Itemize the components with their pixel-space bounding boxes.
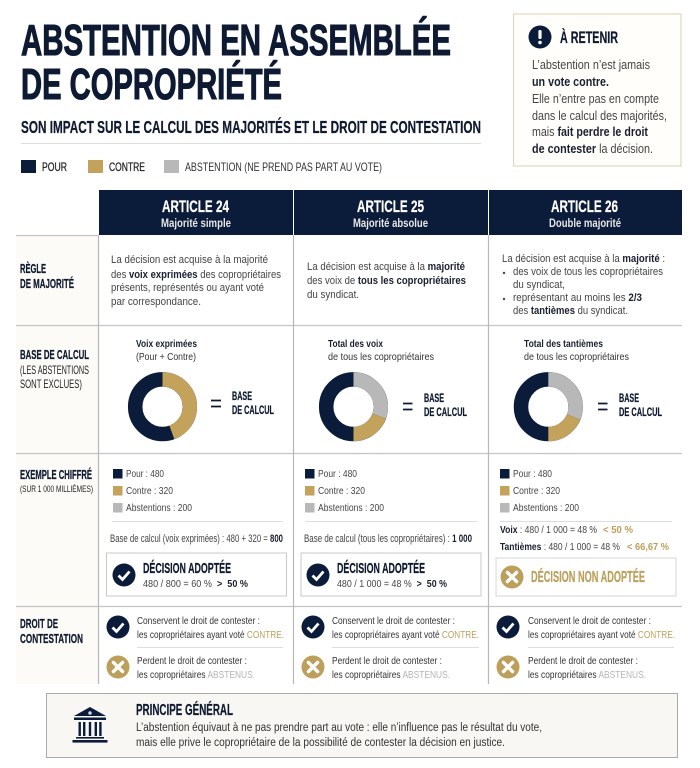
rights: article 26: Conservent le droit de contester :: [528, 615, 651, 627]
donut chart: [326, 379, 381, 434]
row label: exemple chiffré: (SUR 1 000 MILLIÈMES): [20, 484, 93, 494]
base: article 26: [521, 338, 662, 434]
rule text: article 26: des voix de tous les copropriétaires: [513, 266, 663, 278]
callout text: un vote contre.: [532, 75, 609, 89]
callout text: mais fait perdre le droit: [532, 125, 649, 139]
rule text: article 24: par correspondance.: [111, 296, 201, 308]
base: article 26: de tous les copropriétaires: [524, 351, 629, 363]
example: article 26: Voix : 480 / 1 000 = 48 %: [500, 524, 597, 536]
callout text: [532, 58, 667, 156]
header: article 26: Double majorité: [549, 218, 621, 230]
rights: article 25: Perdent le droit de contester :: [332, 655, 442, 667]
rule text: article 24: [111, 254, 281, 308]
example: article 26: [496, 468, 676, 596]
example: article 25: Contre : 320: [318, 485, 365, 497]
panel heading: PRINCIPE GÉNÉRAL: [136, 700, 233, 719]
rights: article 26: les copropriétaires ABSTENUS.: [528, 669, 646, 681]
header: article 26: [489, 190, 682, 235]
title: [21, 15, 451, 109]
rule text: article 24: présents, représentés ou ayant voté: [111, 282, 264, 294]
callout text: Elle n’entre pas en compte: [532, 92, 659, 106]
example: article 26: Abstentions : 200: [513, 502, 579, 514]
row label: exemple chiffré: EXEMPLE CHIFFRÉ: [20, 467, 92, 482]
rule text: article 24: des voix exprimées des copropriétaires: [111, 269, 281, 281]
icon: exclamation: [528, 26, 552, 48]
rule text: article 24: La décision est acquise à la majorité: [111, 254, 268, 266]
header: article 25: [294, 190, 488, 235]
icon: bank building: [72, 707, 108, 743]
example: article 26: Pour : 480: [513, 468, 552, 480]
rights: article 24: les copropriétaires ayant voté CONTRE.: [137, 629, 284, 641]
example: article 26: Tantièmes : 480 / 1 000 = 48 %: [500, 541, 620, 553]
callout text: dans le calcul des majorités,: [532, 109, 667, 123]
example: article 25: Base de calcul (tous les copropriétaires) : 1 000: [304, 533, 472, 545]
example: article 25: [301, 468, 481, 596]
base: article 24: Voix exprimées: [136, 338, 197, 350]
rule text: article 26: [502, 253, 665, 317]
title: DE COPROPRIÉTÉ: [21, 59, 282, 109]
base: article 26: BASE: [619, 391, 639, 405]
rights: article 24: [106, 615, 284, 681]
row label: base de calcul: (LES ABSTENTIONS: [20, 363, 89, 377]
legend: ABSTENTION (NE PREND PAS PART AU VOTE): [185, 160, 382, 174]
panel text: [136, 722, 542, 749]
example: article 26: < 66,67 %: [627, 541, 670, 553]
legend: POUR: [42, 160, 67, 174]
panel text: L’abstention équivaut à ne pas prendre part au vote : elle n’influence pas le résultat du vote,: [136, 722, 542, 734]
base: article 26: DE CALCUL: [619, 405, 662, 419]
donut chart: [521, 379, 576, 434]
base: article 24: (Pour + Contre): [136, 351, 196, 363]
header: article 24: Majorité simple: [161, 218, 231, 230]
rule text: article 25: du syndicat.: [307, 289, 359, 301]
base: article 24: BASE: [232, 389, 252, 403]
callout text: de contester la décision.: [532, 142, 653, 156]
rights: article 25: [302, 615, 479, 681]
base: article 25: BASE: [424, 391, 444, 405]
header: article 25: Majorité absolue: [353, 218, 428, 230]
result box: [106, 553, 286, 596]
callout text: L’abstention n’est jamais: [532, 58, 650, 72]
rights: article 24: les copropriétaires ABSTENUS.: [137, 669, 255, 681]
base: article 25: de tous les copropriétaires: [328, 351, 434, 363]
result box: DÉCISION ADOPTÉE: [143, 560, 231, 577]
base: article 25: DE CALCUL: [424, 405, 467, 419]
row label: règle de majorité: DE MAJORITÉ: [20, 276, 74, 291]
rule text: article 25: La décision est acquise à la majorité: [307, 261, 465, 273]
rule text: article 25: [307, 261, 466, 301]
rule text: article 26: des tantièmes du syndicat.: [513, 305, 628, 317]
rule text: article 26: La décision est acquise à la majorité :: [502, 253, 665, 265]
header: article 24: ARTICLE 24: [162, 197, 229, 216]
callout: à retenir: [514, 14, 681, 166]
rights: article 25: les copropriétaires ayant voté CONTRE.: [332, 629, 479, 641]
title: ABSTENTION EN ASSEMBLÉE: [21, 15, 451, 65]
result box: [301, 553, 481, 596]
row label: base de calcul: BASE DE CALCUL: [20, 348, 89, 362]
donut chart: [135, 379, 190, 434]
base: article 25: [326, 338, 467, 434]
example: article 24: [106, 468, 286, 596]
callout heading: À RETENIR: [560, 28, 618, 47]
result box: 480 / 800 = 60 % > 50 %: [143, 578, 249, 590]
row label: base de calcul: [20, 348, 89, 391]
panel text: mais elle prive le copropriétaire de la possibilité de contester la décision en justice.: [136, 737, 505, 749]
rights: article 24: Perdent le droit de contester :: [137, 655, 247, 667]
rights: article 26: [496, 615, 675, 681]
example: article 24: Pour : 480: [126, 468, 164, 480]
header: article 24: [99, 190, 293, 235]
base: article 24: DE CALCUL: [232, 403, 274, 417]
example: article 24: Abstentions : 200: [126, 502, 192, 514]
example: article 26: Contre : 320: [513, 485, 560, 497]
example: article 24: Base de calcul (voix exprimées) : 480 + 320 = 800: [110, 533, 283, 545]
row label: règle de majorité: [20, 261, 74, 291]
base: article 24: [135, 338, 274, 434]
rights: article 25: les copropriétaires ABSTENUS.: [332, 669, 450, 681]
subtitle: SON IMPACT SUR LE CALCUL DES MAJORITÉS ET LE DROIT DE CONTESTATION: [21, 116, 481, 137]
row label: droit de contestation: CONTESTATION: [20, 632, 83, 646]
rights: article 25: Conservent le droit de contester :: [332, 615, 455, 627]
header: article 26: ARTICLE 26: [551, 197, 618, 216]
base: article 26: Total des tantièmes: [524, 338, 603, 350]
example: article 25: Abstentions : 200: [318, 502, 384, 514]
legend: [21, 160, 382, 174]
result box: DÉCISION ADOPTÉE: [337, 560, 425, 577]
base: article 25: Total des voix: [328, 338, 383, 350]
example: article 26: < 50 %: [603, 524, 634, 536]
rights: article 26: Perdent le droit de contester :: [528, 655, 638, 667]
result box: [496, 558, 676, 596]
left label column background: [16, 236, 98, 684]
header: article 25: ARTICLE 25: [357, 197, 424, 216]
rule text: article 26: du syndicat,: [513, 279, 565, 291]
row label: règle de majorité: RÈGLE: [20, 261, 46, 276]
row label: exemple chiffré: [20, 467, 93, 494]
row label: droit de contestation: [20, 617, 83, 646]
rights: article 24: Conservent le droit de contester :: [137, 615, 260, 627]
example: article 25: Pour : 480: [318, 468, 357, 480]
row label: base de calcul: SONT EXCLUES): [20, 377, 82, 391]
rule text: article 26: représentant au moins les 2/3: [513, 292, 642, 304]
legend: CONTRE: [109, 160, 145, 174]
example: article 24: Contre : 320: [126, 485, 173, 497]
panel: principe général: [46, 694, 678, 758]
rule text: article 25: des voix de tous les copropriétaires: [307, 275, 466, 287]
rights: article 26: les copropriétaires ayant voté CONTRE.: [528, 629, 675, 641]
row label: droit de contestation: DROIT DE: [20, 617, 58, 631]
result box: 480 / 1 000 = 48 % > 50 %: [337, 578, 448, 590]
